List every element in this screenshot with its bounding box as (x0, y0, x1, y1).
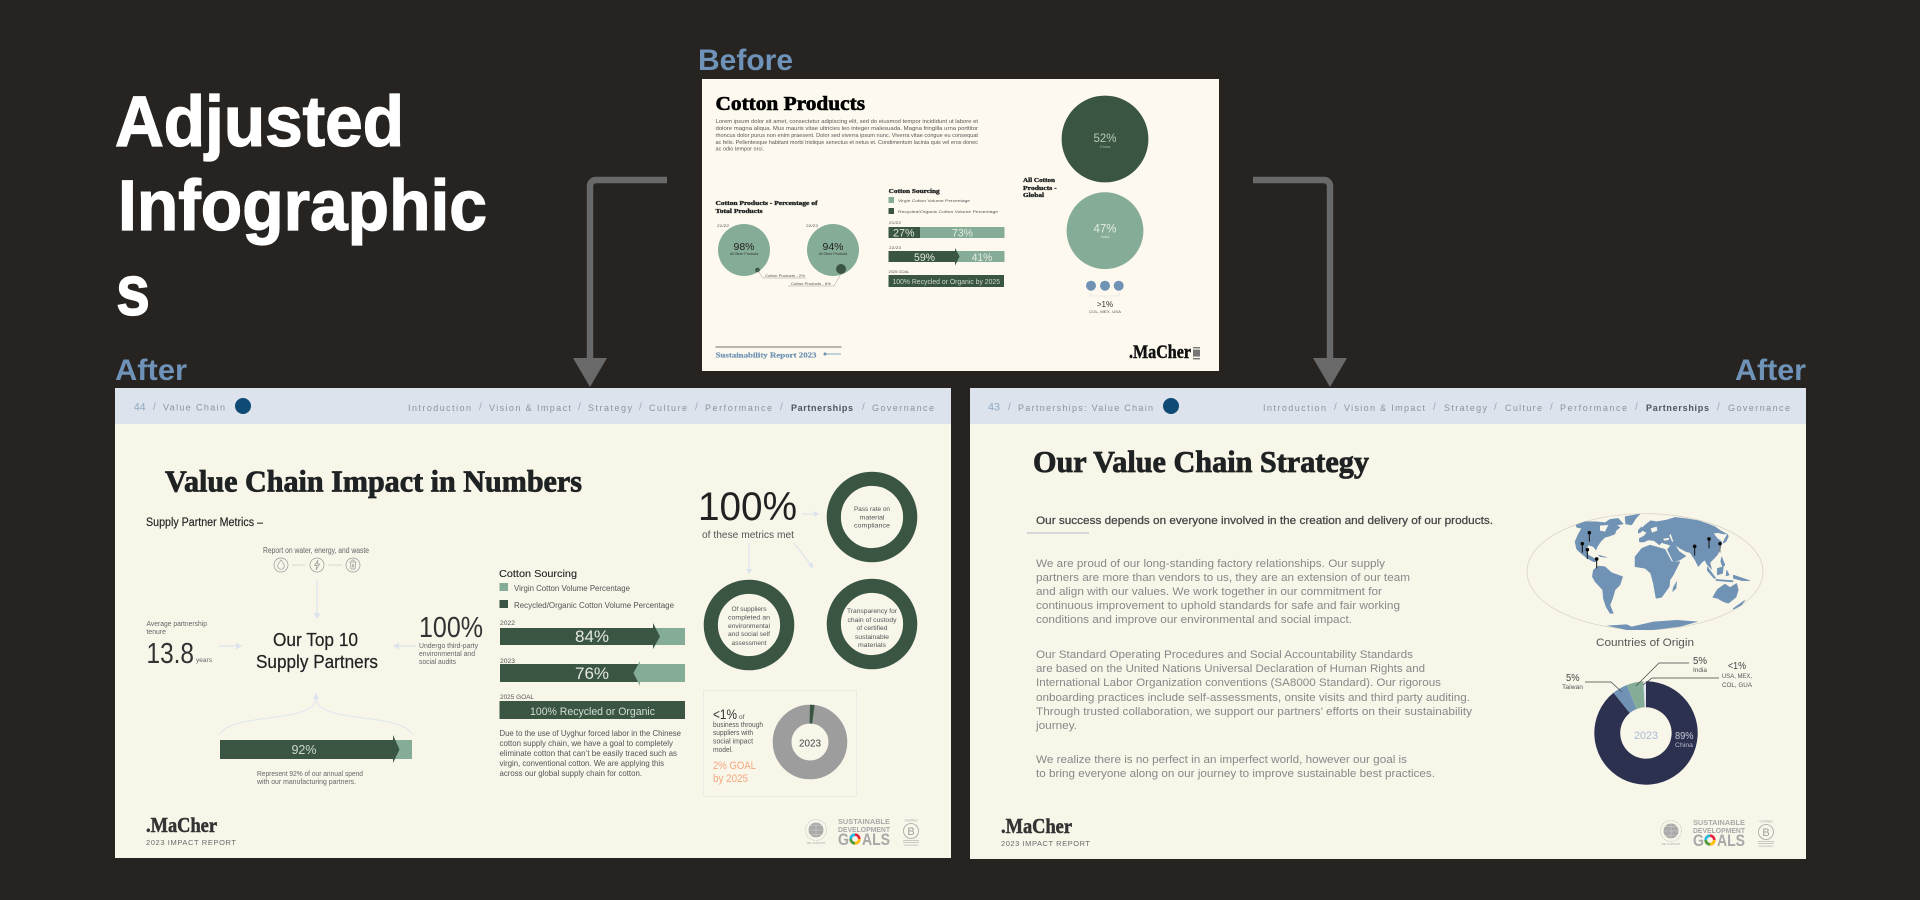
before footer (716, 342, 1200, 363)
donut chart: countries share 2023: Taiwan (1562, 684, 1583, 691)
world map with pins (1527, 514, 1763, 630)
donut chart: countries share 2023: 2023 (1634, 730, 1658, 742)
panel header bar: Performance (705, 403, 772, 413)
chart: cotton sourcing bars: Virgin Cotton Volume Percentage (514, 584, 631, 593)
paragraph 3 (1036, 754, 1435, 780)
card: social impact suppliers: model. (713, 747, 733, 754)
paragraph 1: We are proud of our long-standing factory relationships. Our supply (1036, 558, 1385, 570)
certification logos: Certified (1759, 820, 1773, 824)
metric: average partnership tenure: Average partnership (146, 619, 207, 628)
before chart: cotton sourcing: 100% Recycled or Organic by 2025 (892, 279, 1000, 286)
panel header bar: Performance (1560, 403, 1627, 413)
arrow: left to top 10 (393, 642, 416, 650)
donut: pass rate (834, 479, 910, 555)
panel header bar: 44 (134, 402, 146, 414)
footer logo left: 2023 IMPACT REPORT (146, 838, 236, 847)
certification logos: Corporation (1759, 844, 1774, 848)
metric: 100% third-party audits: social audits (419, 657, 456, 666)
donut: transparency: Transparency for (847, 608, 898, 615)
text block: uyghur labor note (500, 728, 681, 778)
before chart: all cotton products global: India (1101, 234, 1110, 239)
certification logos: ALS (862, 831, 890, 849)
panel header bar: / (479, 402, 482, 413)
certification logos: WE SUPPORT (1662, 842, 1681, 846)
before heading: Cotton Products (716, 93, 865, 115)
donut: supplier self assessment: assessment (732, 640, 767, 647)
center label: our top 10 supply partners: Supply Partners (256, 652, 378, 672)
panel header bar: Partnerships: Value Chain (1018, 403, 1153, 413)
panel header bar (115, 388, 951, 424)
before chart: percentage of total products: All Other Products (730, 252, 758, 256)
card: social impact suppliers: of (739, 714, 745, 721)
before chart: percentage of total products: 21/22 (717, 224, 729, 228)
panel header bar: / (1635, 402, 1638, 413)
paragraph 3: We realize there is no perfect in an imperfect world, however our goal is (1036, 754, 1407, 766)
before chart: all cotton products global: All Cotton (1023, 177, 1055, 184)
certification logos: Certified (904, 818, 918, 822)
before chart: percentage of total products: Total Products (716, 208, 763, 215)
before chart: cotton sourcing: 73% (952, 228, 973, 240)
text block: uyghur labor note: eliminate cotton that can’t be easily traced such as (500, 748, 677, 758)
footer logo left: 2023 IMPACT REPORT (1001, 839, 1090, 848)
footer logo left: .MaCher (1001, 814, 1072, 838)
donut chart: countries share 2023: China (1675, 743, 1694, 749)
metric: report on water energy waste with icons (263, 546, 369, 572)
metric: average partnership tenure: years (196, 657, 213, 664)
panel header bar: / (1494, 402, 1497, 413)
paragraph 2: International Labor Organization conventions (SA8000 Standard). Our rigorous (1036, 677, 1441, 689)
heading: value chain impact in numbers: Value Chain Impact in Numbers (165, 464, 582, 499)
panel header bar: / (578, 402, 581, 413)
bar: 92 percent spend: 92% (291, 743, 317, 757)
paragraph 1: and align with our values. We work together in our commitment for (1036, 586, 1382, 598)
panel header bar: 43 (988, 402, 1000, 414)
before chart: cotton sourcing: 2025 GOAL (888, 270, 910, 274)
paragraph 2: Through trusted collaboration, we support our partners’ efforts on their sustainability (1036, 706, 1472, 718)
panel header bar: / (695, 402, 698, 413)
main title (115, 83, 487, 331)
donut chart: countries share 2023: 5% (1566, 673, 1580, 684)
donut chart: 2023 social impact (782, 705, 838, 770)
before chart: cotton sourcing: 21/22 (889, 221, 901, 225)
before chart: percentage of total products: Cotton Products - 6% (791, 282, 832, 286)
donut: supplier self assessment: completed an (728, 614, 770, 622)
before intro text: ac odio tempor orci. (716, 146, 764, 152)
before chart: percentage of total products: 94% (822, 241, 844, 253)
donut: transparency: sustainable (855, 634, 889, 641)
bar: 92 percent spend: with our manufacturing partners. (256, 777, 356, 786)
metric: 100% third-party audits (419, 612, 483, 666)
card: social impact suppliers (704, 690, 856, 796)
bracket arrow: spend to top 10 (220, 693, 412, 734)
panel header bar: / (1334, 402, 1337, 413)
before chart: all cotton products global: Products - (1023, 185, 1057, 192)
certification logos: Corporation (904, 843, 919, 847)
panel header bar: Partnerships (1646, 403, 1709, 413)
before chart: all cotton products global: Global (1023, 192, 1044, 199)
panel header bar: / (780, 402, 783, 413)
footer logo left (1001, 814, 1090, 848)
panel header bar: / (1433, 402, 1436, 413)
before chart: all cotton products global: >1% (1097, 300, 1113, 309)
before chart: percentage of total products: 98% (733, 241, 755, 253)
paragraph 3: to bring everyone along on our journey to improve sustainable best practices. (1036, 768, 1435, 780)
donut chart: countries share 2023: India (1693, 667, 1707, 674)
donut: pass rate: Pass rate on (854, 506, 890, 513)
metric: 100 percent of these metrics met: of these metrics met (702, 529, 794, 541)
certification logos: ALS (1717, 832, 1745, 850)
before footer: Sustainability Report 2023 (716, 350, 817, 360)
label: countries of origin: Countries of Origin (1596, 637, 1694, 649)
before chart: percentage of total products: Cotton Products - 2% (765, 274, 806, 278)
panel header bar: Governance (872, 403, 934, 413)
chart: cotton sourcing bars: 2025 GOAL (500, 694, 534, 701)
bar: 92 percent spend: Represent 92% of our annual spend (257, 769, 363, 778)
panel header bar: Introduction (1263, 403, 1326, 413)
before intro text: Lorem ipsum dolor sit amet, consectetur adipiscing elit, sed do eiusmod tempor incididunt ut labore et (716, 119, 979, 125)
panel header bar: Vision & Impact (1344, 403, 1425, 413)
label: before: Before (698, 44, 793, 77)
before chart: percentage of total products (716, 200, 859, 286)
donut chart: countries share 2023: USA, MEX, (1722, 673, 1752, 680)
before chart: all cotton products global (1023, 96, 1148, 314)
footer logo left: .MaCher (146, 813, 217, 837)
before chart: all cotton products global: 47% (1093, 224, 1117, 236)
before intro text: rhoncus dolor purus non enim praesent. Dolor sed viverra ipsum nunc. Viverra vitae congue eu consequat (716, 133, 979, 139)
before chart: cotton sourcing: 59% (914, 252, 935, 264)
panel header bar: Culture (1505, 403, 1542, 413)
panel: value chain impact in numbers (115, 388, 951, 858)
donut chart: countries share 2023: <1% (1728, 661, 1746, 672)
donut: transparency: chain of custody (848, 617, 897, 624)
panel header bar: Culture (649, 403, 687, 413)
panel header bar: Strategy (588, 403, 632, 413)
panel header bar: Governance (1728, 403, 1790, 413)
donut: transparency: of certified (856, 625, 888, 632)
metric: average partnership tenure: 13.8 (146, 638, 194, 670)
paragraph 2: Our Standard Operating Procedures and Social Accountability Standards (1036, 649, 1413, 661)
donut: transparency: materials (858, 642, 887, 649)
panel header bar: Partnerships (791, 403, 853, 413)
panel header bar: / (1008, 402, 1011, 413)
donut chart: countries share 2023: COL, GUA (1722, 682, 1753, 689)
paragraph 1: partners are more than vendors to us, they are an extension of our team (1036, 572, 1410, 584)
donut chart: 2023 social impact: 2023 (799, 738, 821, 750)
certification logos: B (1762, 827, 1770, 839)
footer logo left (146, 813, 236, 847)
before chart: all cotton products global: COL, MEX, USA (1089, 309, 1121, 314)
panel header bar: Vision & Impact (489, 403, 571, 413)
card: social impact suppliers: suppliers with (713, 730, 753, 737)
certification logos: WE SUPPORT (807, 841, 826, 845)
before chart: all cotton products global: China (1100, 144, 1111, 149)
paragraph 1: continuous improvement to uphold standards for safe and fair working (1036, 600, 1400, 612)
donut: supplier self assessment (711, 587, 787, 663)
subheading: supply partner metrics: Supply Partner Metrics – (146, 517, 264, 529)
certification logos (806, 817, 919, 849)
donut: pass rate: compliance (854, 522, 890, 530)
certification logos: DEVELOPMENT (838, 825, 890, 834)
metric: report on water energy waste with icons: Report on water, energy, and waste (263, 546, 369, 555)
paragraph 2: are based on the United Nations Universal Declaration of Human Rights and (1036, 663, 1425, 675)
metric: 100% third-party audits: 100% (419, 612, 483, 644)
before chart: percentage of total products: All Other Products (819, 252, 847, 256)
certification logos: DEVELOPMENT (1693, 826, 1745, 835)
before footer: .MaCher (1129, 342, 1191, 363)
panel header bar: / (1717, 402, 1720, 413)
certification logos: B (907, 826, 915, 838)
certification logos (1660, 818, 1774, 850)
donut: supplier self assessment: Of suppliers (732, 606, 767, 613)
certification logos: G (838, 831, 849, 849)
panel: our value chain strategy (970, 388, 1806, 859)
card: social impact suppliers: 2% GOAL (713, 760, 756, 772)
paragraph 2: journey. (1035, 720, 1077, 732)
center label: our top 10 supply partners: Our Top 10 (273, 630, 358, 650)
before intro text: ac felis. Pellentesque habitant morbi tristique senectus et netus et. Condimentum lacinia quis vel eros donec (716, 140, 978, 146)
arrow: before to right after (1253, 180, 1347, 387)
donut chart: countries share 2023: 5% (1693, 656, 1707, 667)
main title: Infographic (118, 167, 487, 246)
label: after right: After (1735, 354, 1806, 387)
certification logos: SUSTAINABLE (838, 817, 890, 826)
paragraph 2: onboarding practices include self-assessments, onsite visits and third party auditing. (1036, 692, 1470, 704)
heading: our value chain strategy: Our Value Chain Strategy (1033, 444, 1369, 479)
main title: s (116, 252, 150, 331)
donut chart: countries share 2023: 89% (1675, 731, 1694, 742)
before chart: percentage of total products: 22/23 (806, 224, 818, 228)
panel header bar: / (862, 402, 865, 413)
donut: pass rate: material (860, 514, 885, 522)
paragraph 1: conditions and improve our environmental and social impact. (1036, 614, 1352, 626)
panel header bar: / (153, 402, 156, 413)
paragraph 2 (1035, 649, 1472, 732)
chart: cotton sourcing bars: 84% (575, 627, 609, 646)
before chart: cotton sourcing: 27% (893, 228, 915, 240)
chart: cotton sourcing bars: 2023 (500, 658, 515, 665)
chart: cotton sourcing bars (499, 568, 685, 719)
card: social impact suppliers: <1% (713, 706, 737, 722)
paragraph 1 (1036, 558, 1410, 626)
panel header bar: / (639, 402, 642, 413)
text block: uyghur labor note: across our global supply chain for cotton. (500, 768, 642, 778)
before intro text (716, 119, 979, 152)
metric: average partnership tenure (146, 619, 213, 670)
text block: uyghur labor note: Due to the use of Uyghur forced labor in the Chinese (500, 728, 681, 738)
certification logos: G (1693, 832, 1704, 850)
card: social impact suppliers: business through (713, 722, 763, 729)
chart: cotton sourcing bars: 2022 (500, 620, 515, 627)
card: social impact suppliers: social impact (713, 738, 753, 746)
panel header bar: Value Chain (163, 402, 225, 412)
lead sentence: Our success depends on everyone involved in the creation and delivery of our products. (1036, 515, 1493, 527)
donut: transparency (834, 586, 910, 662)
before intro text: dolore magna aliqua. Mus mauris vitae ultricies leo integer malesuada. Magna fringilla urna porttitor (716, 126, 978, 132)
bar: 92 percent spend (220, 735, 412, 786)
before chart: cotton sourcing: Virgin Cotton Volume Percentage (898, 198, 971, 203)
text block: uyghur labor note: cotton supply chain, we have a goal to completely (500, 738, 674, 748)
main title: Adjusted (115, 83, 404, 162)
metric: 100 percent of these metrics met: 100% (698, 485, 797, 529)
chart: cotton sourcing bars: 76% (575, 664, 609, 683)
label: after left: After (115, 354, 187, 387)
chart: cotton sourcing bars: Cotton Sourcing (499, 568, 577, 580)
text block: uyghur labor note: virgin, conventional cotton. We are applying this (500, 758, 664, 768)
donut: supplier self assessment: and social self (728, 631, 770, 638)
before chart: cotton sourcing: 22/23 (889, 246, 901, 250)
card: social impact suppliers: by 2025 (713, 773, 748, 785)
panel header bar: Strategy (1444, 403, 1488, 413)
center label: our top 10 supply partners (256, 630, 378, 672)
panel: before cotton products (702, 79, 1219, 371)
before chart: cotton sourcing: Recycled/Organic Cotton Volume Percentage (898, 209, 999, 214)
donut chart: countries share 2023 (1562, 656, 1753, 785)
metric: 100% third-party audits: Undergo third-party (419, 641, 478, 650)
arrow: down to top 10 (314, 580, 320, 619)
before chart: cotton sourcing (888, 188, 1004, 287)
before chart: cotton sourcing: 41% (972, 252, 992, 264)
chart: cotton sourcing bars: Recycled/Organic Cotton Volume Percentage (514, 601, 675, 610)
metric: average partnership tenure: tenure (146, 627, 166, 636)
panel header bar (970, 388, 1806, 424)
before chart: all cotton products global: 52% (1093, 133, 1117, 145)
arrow: before to left after (573, 180, 667, 387)
before chart: percentage of total products: Cotton Products - Percentage of (716, 200, 819, 207)
before chart: cotton sourcing: Cotton Sourcing (889, 188, 940, 195)
chart: cotton sourcing bars: 100% Recycled or Organic (530, 706, 655, 718)
panel header bar: / (1550, 402, 1553, 413)
certification logos: SUSTAINABLE (1693, 818, 1745, 827)
arrow: right to top 10 (219, 642, 242, 650)
panel header bar: Introduction (408, 403, 471, 413)
metric: 100% third-party audits: environmental and (419, 649, 475, 658)
arrows from 100 percent to donuts (746, 511, 819, 574)
donut: supplier self assessment: environmental (728, 623, 770, 630)
